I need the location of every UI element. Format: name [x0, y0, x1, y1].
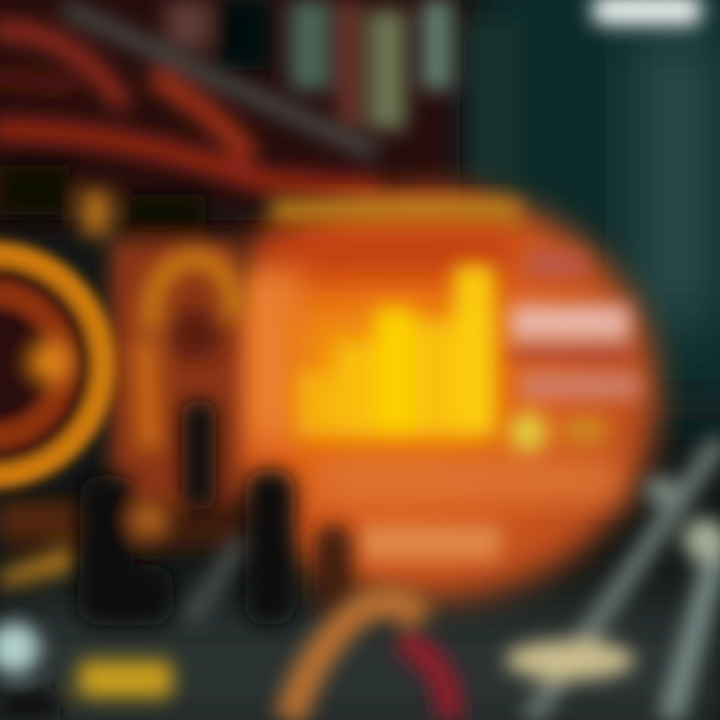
red roof beams	[0, 10, 370, 190]
dark silhouettes	[78, 400, 351, 625]
dark frame behind gears	[0, 165, 250, 550]
glowing bar chart	[298, 265, 495, 438]
right rails	[505, 440, 720, 720]
top windows and columns	[165, 0, 702, 180]
central orange disc	[202, 190, 658, 600]
lower foreground	[0, 540, 450, 720]
second gear	[145, 258, 235, 450]
red and white stripes	[508, 252, 640, 452]
lower left stripe	[0, 510, 80, 587]
large gear	[0, 253, 104, 477]
